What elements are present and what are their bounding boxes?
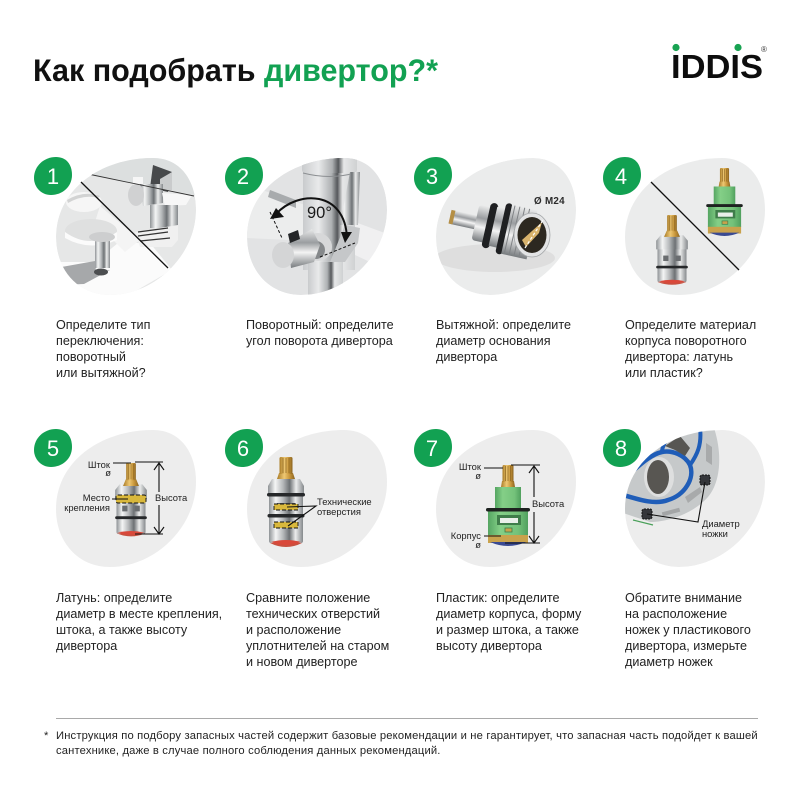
measurement labels: ø: [105, 467, 111, 478]
text 8: диаметр ножек: [625, 655, 713, 669]
text 1: переключения:: [56, 334, 144, 348]
badge 3: [414, 157, 452, 195]
text 8: ножек у пластикового: [625, 623, 751, 637]
text 7: высоту дивертора: [436, 639, 542, 653]
footnote: сантехнике, даже в случае полного соблюдения данных рекомендаций.: [56, 745, 441, 757]
text 7: Пластик: определите: [436, 591, 560, 605]
mounting place mark: [116, 495, 146, 503]
measurement labels: Корпус: [451, 530, 481, 541]
badge 2: 2: [237, 164, 249, 189]
measurement labels: [64, 459, 188, 513]
text 7: диаметр корпуса, форму: [436, 607, 582, 621]
panel 2: rotation angle: [225, 150, 394, 348]
panel 3: base diameter: [414, 157, 576, 364]
badge 6: 6: [237, 436, 249, 461]
text 4: дивертора: латунь: [625, 350, 734, 364]
image: pull-out diverter with M24 thread: [435, 158, 576, 295]
text 4: Определите материал: [625, 318, 756, 332]
text 3: диаметр основания: [436, 334, 551, 348]
logo: IDDIS: ®: [761, 45, 767, 54]
badge 8: [603, 429, 641, 467]
text 5: Латунь: определите: [56, 591, 172, 605]
rotation arrow arc: [276, 198, 347, 238]
text 1: Определите тип: [56, 318, 150, 332]
measurement labels: Шток: [459, 461, 482, 472]
text 8: на расположение: [625, 607, 727, 621]
text 2: Поворотный: определите: [246, 318, 394, 332]
label: ножки: [702, 528, 728, 539]
measurement labels: [451, 461, 565, 550]
text 8: дивертора, измерьте: [625, 639, 747, 653]
badge 4: [603, 157, 641, 195]
badge 2: [225, 157, 263, 195]
plastic cartridge: [486, 465, 530, 546]
panel 5: brass measurements: [34, 429, 222, 653]
measurement lines: [112, 462, 164, 534]
text 4: или пластик?: [625, 366, 703, 380]
text 1: или вытяжной?: [56, 366, 146, 380]
angle dashed lines: [270, 212, 355, 257]
badge 5: 5: [47, 436, 59, 461]
blob background: [436, 430, 576, 567]
badge 3: 3: [426, 164, 438, 189]
measurement labels: Высота: [155, 492, 188, 503]
label: Технические: [317, 496, 372, 507]
blob background: [247, 430, 387, 567]
panel 1: switch type: [34, 150, 200, 380]
pointer lines: [647, 482, 705, 522]
panel 8: leg diameter: [603, 425, 765, 669]
title: Как подобрать дивертор?*: [33, 52, 439, 88]
text 5: диаметр в месте крепления,: [56, 607, 222, 621]
measurement labels: ø: [475, 539, 481, 550]
footnote: *: [44, 730, 49, 742]
panel 6: technical holes: [225, 429, 389, 669]
badge 6: [225, 429, 263, 467]
measurement labels: Место: [83, 492, 110, 503]
diagonal divider: [81, 182, 168, 268]
label M24: Ø M24: [534, 196, 565, 207]
measurement labels: Шток: [88, 459, 111, 470]
image: cartridge underside: [625, 430, 765, 567]
measurement lines: [484, 465, 540, 543]
logo: IDDIS: IDDIS: [671, 49, 763, 86]
label 90 degrees: 90°: [307, 204, 332, 222]
blob background: [56, 430, 196, 567]
text 1: поворотный: [56, 350, 126, 364]
text 5: штока, а также высоту: [56, 623, 188, 637]
measurement labels: Высота: [532, 498, 565, 509]
text 2: угол поворота дивертора: [246, 334, 393, 348]
text 3: дивертора: [436, 350, 497, 364]
text 4: корпуса поворотного: [625, 334, 747, 348]
plastic cartridge: [706, 168, 743, 236]
label: Диаметр: [702, 518, 740, 529]
metal cartridge: [115, 463, 147, 536]
text 5: дивертора: [56, 639, 117, 653]
text 6: и новом диверторе: [246, 655, 358, 669]
text 7: и размер штока, а также: [436, 623, 579, 637]
pointer lines: [287, 506, 316, 526]
technical hole marks: [274, 504, 298, 528]
badge 8: 8: [615, 436, 627, 461]
badge 1: [34, 157, 72, 195]
panel 4: body material: [603, 157, 765, 380]
diagonal divider: [651, 182, 739, 270]
badge 4: 4: [615, 164, 627, 189]
measurement labels: ø: [475, 470, 481, 481]
leg markers: [642, 475, 710, 519]
text 6: и расположение: [246, 623, 341, 637]
text 3: Вытяжной: определите: [436, 318, 571, 332]
blob background: [625, 158, 765, 295]
text 6: уплотнителей на старом: [246, 639, 389, 653]
badge 7: [414, 429, 452, 467]
label: отверстия: [317, 506, 361, 517]
text 6: Сравните положение: [246, 591, 370, 605]
image: bath faucet and shower switch: [56, 158, 196, 290]
metal cartridge: [267, 457, 305, 547]
badge 1: 1: [47, 164, 59, 189]
panel 7: plastic measurements: [414, 429, 582, 653]
image: rotary diverter with 90 degree arc: [247, 158, 387, 295]
badge 7: 7: [426, 436, 438, 461]
text 8: Обратите внимание: [625, 591, 742, 605]
measurement labels: крепления: [64, 502, 110, 513]
metal cartridge: [656, 215, 688, 285]
footnote: Инструкция по подбору запасных частей содержит базовые рекомендации и не гарантирует, что запасная часть подойдет к вашей: [56, 730, 758, 742]
badge 5: [34, 429, 72, 467]
text 6: технических отверстий: [246, 607, 380, 621]
